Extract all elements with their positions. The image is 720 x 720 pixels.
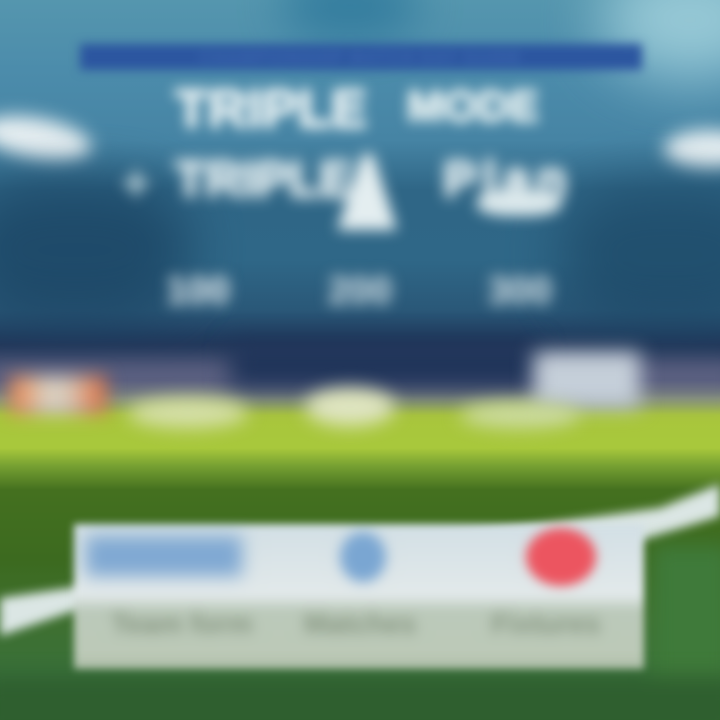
sky highlight (600, 0, 720, 80)
stat two: 200 (328, 270, 392, 312)
title banner (80, 44, 642, 70)
stadium stands right (560, 185, 720, 325)
information panel (74, 524, 644, 670)
heading word four: Plan (443, 151, 573, 207)
heading word three: TRIPLE (175, 151, 353, 207)
stat three: 300 (488, 270, 552, 312)
stadium stands left (0, 180, 190, 320)
panel red badge (526, 528, 596, 586)
panel text column one: Team form (111, 608, 253, 639)
panel text column three: Fixtures (492, 608, 600, 639)
heading descender (477, 190, 561, 216)
heading centre letter (337, 154, 397, 230)
panel blue badge (340, 532, 386, 582)
stat labels row (160, 267, 560, 314)
heading line one (167, 79, 546, 139)
goal (534, 352, 640, 408)
panel text column two: Matches (304, 608, 416, 639)
heading small mark: + (121, 155, 151, 211)
heading word two: MODE (407, 82, 539, 131)
pitch marker right (460, 402, 580, 428)
crowd band (0, 358, 720, 400)
heading word one: TRIPLE (175, 79, 367, 139)
foreground grass (0, 676, 720, 720)
left cloud (0, 109, 95, 167)
pitch marker centre (305, 388, 395, 426)
bottom right grass (652, 545, 720, 720)
panel blue label (86, 536, 242, 576)
sky highlight centre (280, 0, 420, 40)
centre stand shadow (230, 342, 540, 388)
right cloud (664, 130, 720, 168)
red players (10, 376, 106, 414)
banner text: CHAMPIONSHIP MATCH DAY GUIDE (200, 48, 522, 67)
pitch markers (128, 398, 248, 428)
stat one: 100 (166, 270, 230, 312)
heading line two (117, 145, 576, 241)
